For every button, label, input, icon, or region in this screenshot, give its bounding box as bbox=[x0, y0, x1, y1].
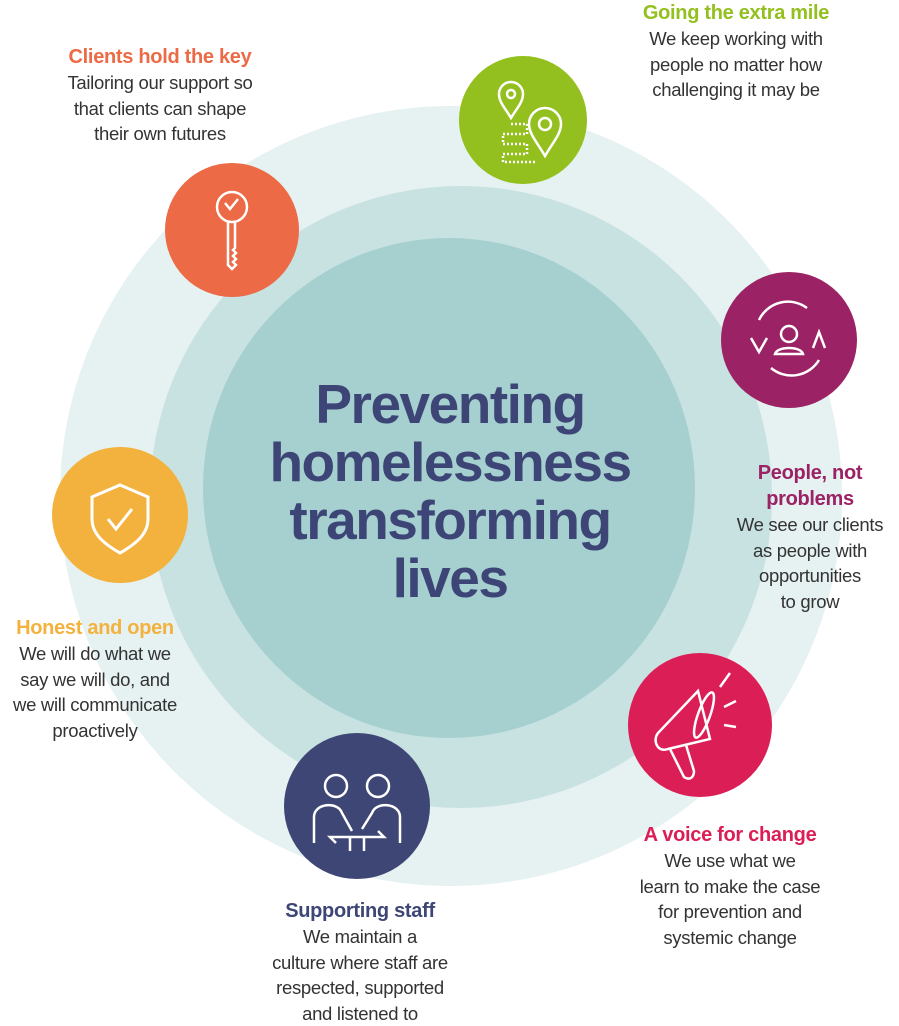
text: supporting staff: We maintain a bbox=[303, 926, 417, 947]
text: supporting staff bbox=[272, 900, 448, 1024]
text: going the extra mile: people no matter how bbox=[650, 54, 822, 74]
text: supporting staff: respected, supported bbox=[276, 977, 444, 998]
text: supporting staff: and listened to bbox=[302, 1002, 418, 1024]
text: honest and open: proactively bbox=[52, 720, 138, 740]
text: clients hold the key bbox=[67, 46, 253, 144]
text: clients hold the key: that clients can shape bbox=[74, 98, 246, 118]
icon: shield bbox=[52, 447, 188, 583]
text: going the extra mile: Going the extra mile bbox=[643, 2, 829, 24]
background circle outer bbox=[60, 106, 842, 886]
text: a voice for change: for prevention and bbox=[658, 901, 802, 922]
title: transforming bbox=[289, 489, 611, 551]
icon: person cycle bbox=[721, 272, 857, 408]
text: people not problems: People, not bbox=[758, 462, 862, 484]
title: lives bbox=[393, 547, 507, 609]
text: a voice for change: A voice for change bbox=[644, 824, 816, 846]
background circle middle bbox=[150, 186, 772, 808]
text: people not problems: to grow bbox=[781, 590, 839, 612]
icon: map pins bbox=[459, 56, 587, 184]
text: going the extra mile bbox=[643, 2, 829, 100]
text: people not problems: opportunities bbox=[759, 565, 861, 586]
text: people not problems: as people with bbox=[753, 540, 867, 560]
icon: people exchange bbox=[284, 733, 430, 879]
text: supporting staff: culture where staff are bbox=[272, 952, 448, 972]
title bbox=[269, 373, 631, 609]
icon: key bbox=[165, 163, 299, 297]
text: people not problems: We see our clients bbox=[737, 514, 883, 535]
text: people not problems bbox=[736, 462, 883, 612]
text: supporting staff: Supporting staff bbox=[285, 900, 435, 922]
text: clients hold the key: Clients hold the key bbox=[69, 46, 251, 68]
text: a voice for change: We use what we bbox=[664, 850, 796, 871]
title: homelessness bbox=[269, 431, 631, 493]
text: honest and open bbox=[13, 617, 177, 741]
text: people not problems: problems bbox=[766, 488, 854, 510]
text: honest and open: Honest and open bbox=[16, 617, 174, 639]
title: Preventing bbox=[315, 373, 585, 435]
text: going the extra mile: challenging it may be bbox=[652, 79, 820, 100]
text: going the extra mile: We keep working with bbox=[649, 28, 823, 49]
text: a voice for change: systemic change bbox=[663, 926, 797, 948]
text: honest and open: we will communicate bbox=[13, 694, 177, 715]
icon: megaphone bbox=[628, 653, 772, 797]
text: honest and open: say we will do, and bbox=[20, 668, 170, 690]
text: clients hold the key: Tailoring our support so bbox=[67, 72, 253, 93]
background circle inner bbox=[203, 238, 695, 738]
text: clients hold the key: their own futures bbox=[94, 123, 226, 144]
text: honest and open: We will do what we bbox=[19, 643, 171, 664]
text: a voice for change bbox=[640, 824, 820, 948]
text: a voice for change: learn to make the case bbox=[640, 876, 820, 896]
